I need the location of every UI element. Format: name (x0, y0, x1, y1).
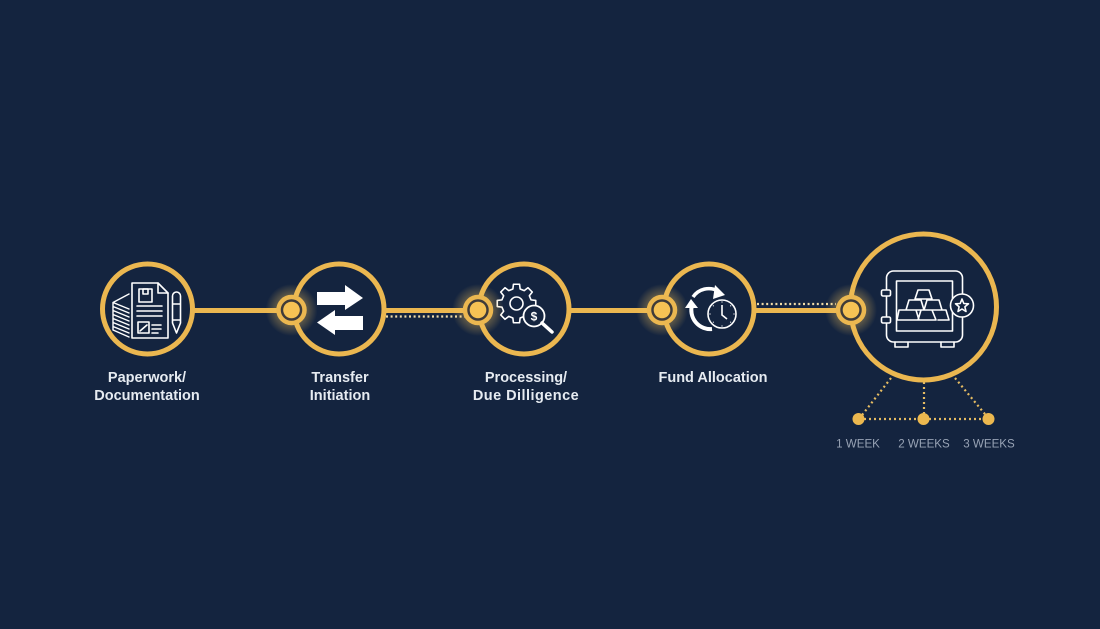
step 4: fund allocation (664, 264, 754, 354)
label: processing: Processing/ (485, 370, 567, 386)
step 1: paperwork (102, 264, 192, 354)
icon: safe with gold bars (882, 271, 974, 347)
icon: documents and pen (113, 283, 180, 338)
connector line (190, 308, 850, 313)
transfer node 4 (825, 284, 877, 336)
dotted connector: allocation to vault (757, 303, 836, 305)
ring: vault (850, 234, 996, 380)
icon text: dollar: $ (531, 310, 538, 324)
label: transfer: Transfer (311, 370, 369, 386)
timeline tree (852, 378, 994, 425)
ring: fund allocation (664, 264, 754, 354)
label: paperwork: Documentation (94, 388, 200, 404)
transfer node 3 (636, 284, 688, 336)
ring: processing (479, 264, 569, 354)
label: transfer: Initiation (310, 388, 370, 404)
step 2: transfer (294, 264, 384, 354)
dot: 3 weeks (982, 413, 994, 425)
icon: cycle arrows and clock (685, 285, 736, 329)
label: 1 week: 1 WEEK (836, 438, 880, 450)
dot: 2 weeks (918, 413, 930, 425)
label: paperwork: Paperwork/ (108, 370, 186, 386)
label: 2 weeks: 2 WEEKS (898, 438, 950, 450)
icon: transfer arrows (317, 285, 363, 335)
label: processing: Due Dilligence (473, 388, 579, 404)
dot: 1 week (852, 413, 864, 425)
transfer node 1 (266, 284, 318, 336)
ring: transfer (294, 264, 384, 354)
dotted connector: transfer to processing (386, 315, 466, 318)
step 3: processing (479, 264, 569, 354)
label: fund allocation: Fund Allocation (658, 370, 768, 386)
ring: paperwork (102, 264, 192, 354)
icon: gear and magnifier (497, 284, 552, 332)
step 5: vault (850, 234, 996, 380)
label: 3 weeks: 3 WEEKS (963, 438, 1015, 450)
transfer node 2 (452, 284, 504, 336)
